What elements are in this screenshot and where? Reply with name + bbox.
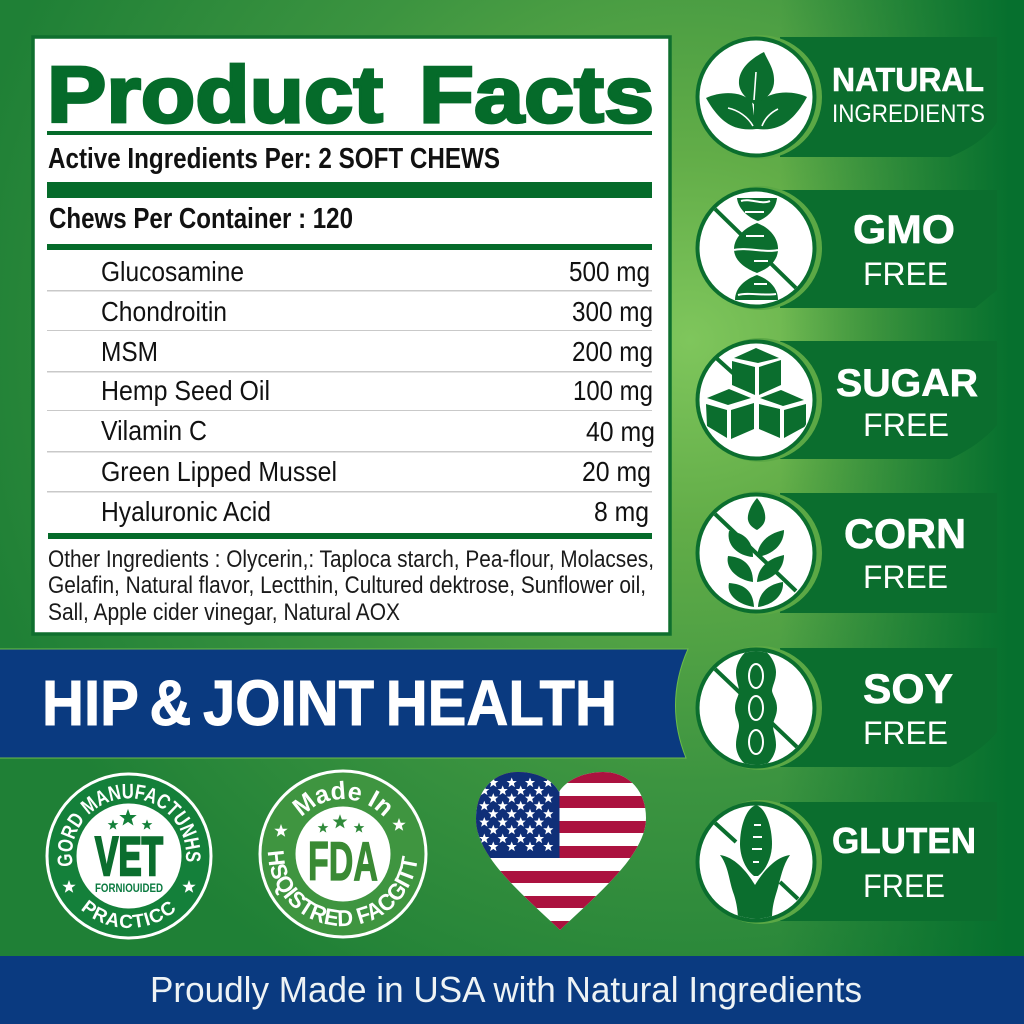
seal center label: FORNIOUIDED (95, 881, 163, 895)
label: SOY (863, 665, 953, 712)
other ingredients: Gelafin, Natural flavor, Lectthin, Cultured dektrose, Sunflower oil, (48, 572, 646, 599)
label (832, 820, 976, 904)
chews per container (47, 203, 652, 250)
label: FREE (863, 868, 945, 904)
other ingredients: Sall, Apple cider vinegar, Natural AOX (48, 599, 400, 626)
seal center label (95, 825, 163, 895)
other ingredients (48, 546, 654, 626)
icon: leaves (706, 52, 807, 129)
heart flag (470, 770, 650, 935)
row: chondroitin (101, 296, 653, 327)
label: FREE (863, 715, 948, 751)
row: vitamin c: Vilamin C (101, 415, 207, 446)
seal center label: VET (95, 825, 163, 887)
row: msm (101, 336, 653, 367)
title (47, 50, 654, 139)
row: glucosamine: Glucosamine (101, 256, 244, 287)
seal curved text: HSQISTRED FACGITT (268, 850, 417, 926)
label: FREE (863, 256, 948, 292)
seal: fda (258, 770, 428, 938)
label: NATURAL (832, 61, 984, 98)
row: glucosamine: 500 mg (569, 256, 650, 287)
icon: sugar cubes crossed out (706, 348, 806, 439)
label: GLUTEN (832, 820, 976, 861)
row: green lipped mussel (101, 456, 651, 487)
badge: gluten free (696, 800, 997, 924)
label: CORN (844, 510, 966, 557)
row: glucosamine (101, 256, 650, 287)
seal curved text: GORD MANUFACTUNHS (58, 784, 201, 866)
row: green lipped mussel: 20 mg (582, 456, 651, 487)
row: green lipped mussel: Green Lipped Mussel (101, 456, 337, 487)
icon: dna crossed out (714, 198, 798, 300)
label (832, 61, 985, 128)
row: hemp seed oil (101, 375, 653, 406)
row: hyaluronic acid: 8 mg (594, 496, 649, 527)
row: vitamin c: 40 mg (586, 416, 655, 447)
badge: sugar free (696, 338, 997, 462)
icon: corn cob crossed out (714, 805, 798, 920)
label: FREE (863, 559, 948, 595)
badge: soy free (696, 646, 997, 770)
chews per container: Chews Per Container : 120 (49, 203, 353, 235)
label (836, 362, 978, 443)
icon: wheat crossed out (714, 498, 796, 607)
footer bar (0, 956, 1024, 1024)
title: Product (47, 50, 383, 139)
seal stars (62, 809, 196, 893)
row: hyaluronic acid (101, 496, 649, 527)
seal curved text: PRACTICC (81, 900, 175, 928)
row: hemp seed oil: 100 mg (573, 375, 653, 406)
banner: hip and joint health (0, 649, 688, 758)
row: vitamin c (101, 415, 655, 447)
title: Facts (419, 50, 654, 139)
label: INGREDIENTS (832, 100, 985, 128)
label: GMO (853, 208, 955, 252)
ingredient table (47, 256, 655, 527)
row: hemp seed oil: Hemp Seed Oil (101, 375, 270, 406)
panel: product facts (33, 37, 670, 634)
badge: natural ingredients (696, 35, 997, 159)
other ingredients: Other Ingredients : Olycerin,: Taploca starch, Pea-flour, Molacses, (48, 546, 654, 573)
row: chondroitin: Chondroitin (101, 296, 227, 327)
label (853, 208, 955, 292)
row: hyaluronic acid: Hyaluronic Acid (101, 496, 271, 527)
footer bar: Proudly Made in USA with Natural Ingredients (150, 969, 862, 1010)
badge: gmo free (696, 186, 997, 310)
seal curved text (58, 784, 201, 928)
row: msm: 200 mg (572, 336, 653, 367)
banner: hip and joint health: HIP & JOINT HEALTH (42, 667, 617, 739)
seal center label: FDA (308, 830, 378, 892)
label (863, 665, 953, 751)
row: msm: MSM (101, 336, 158, 367)
serving size line (47, 131, 652, 198)
row: chondroitin: 300 mg (572, 296, 653, 327)
seal: vet (46, 772, 212, 940)
seal curved text: Made In (292, 780, 391, 816)
seal stars (274, 814, 406, 837)
badge: corn free (696, 491, 997, 615)
seal curved text (268, 780, 417, 926)
icon: soybean pod crossed out (714, 648, 798, 768)
label (844, 510, 966, 595)
label: SUGAR (836, 362, 978, 405)
label: FREE (863, 407, 949, 443)
serving size line: Active Ingredients Per: 2 SOFT CHEWS (48, 143, 500, 175)
